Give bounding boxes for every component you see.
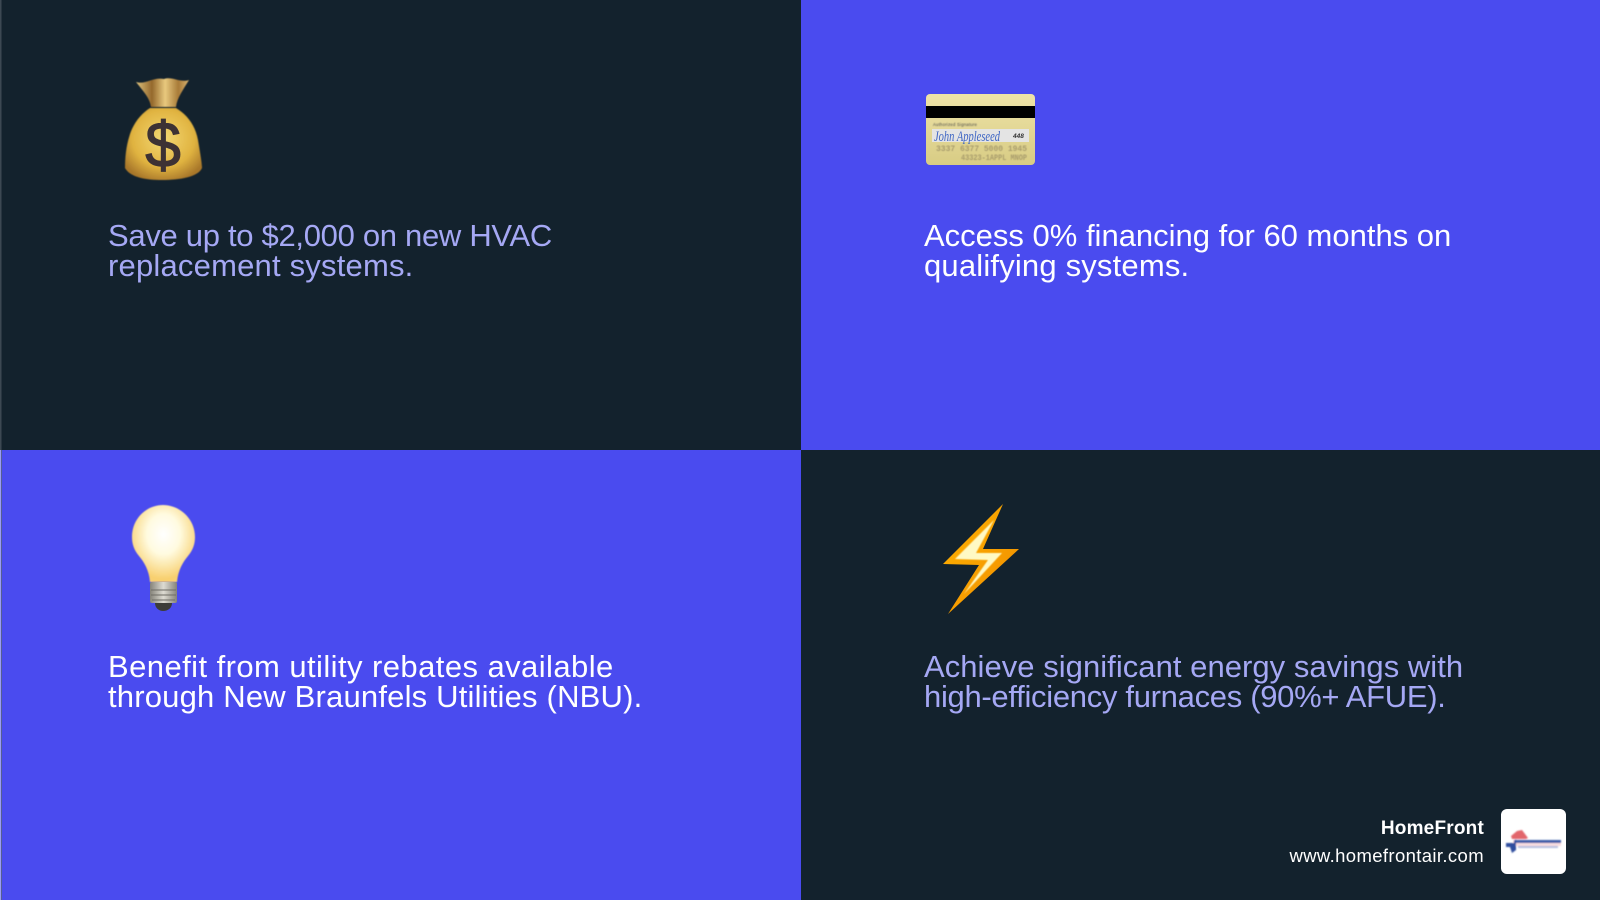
brand name: HomeFront bbox=[1381, 818, 1484, 839]
text: save up to $2,000: replacement systems. bbox=[108, 248, 414, 283]
icon: money bag bbox=[125, 78, 202, 181]
text: save up to $2,000: Save up to $2,000 on new HVAC bbox=[108, 218, 552, 253]
text: financing: Access 0% financing for 60 months on bbox=[924, 218, 1451, 253]
text: energy savings: high-efficiency furnaces (90%+ AFUE). bbox=[924, 679, 1446, 714]
panel: energy savings bbox=[801, 450, 1600, 900]
icon: credit card bbox=[926, 94, 1035, 165]
panel: utility rebates bbox=[2, 450, 801, 900]
icon: lightning bolt bbox=[943, 504, 1019, 614]
website url: www.homefrontair.com bbox=[1289, 845, 1484, 866]
panel: rebates savings bbox=[2, 0, 801, 450]
left edge strip bbox=[0, 0, 2, 900]
icon: credit card: John Appleseed bbox=[934, 129, 1000, 145]
icon: light bulb bbox=[132, 505, 195, 611]
text: utility rebates: through New Braunfels Utilities (NBU). bbox=[108, 679, 642, 714]
text: financing: qualifying systems. bbox=[924, 248, 1189, 283]
logo badge bbox=[1501, 809, 1566, 874]
icon: credit card: 3337 6377 5000 1945 bbox=[936, 145, 1027, 154]
panel: financing bbox=[801, 0, 1600, 450]
text: save up to $2,000 bbox=[108, 218, 552, 283]
icon: credit card: 43323-1APPL MNOP bbox=[961, 154, 1027, 163]
text: utility rebates bbox=[108, 649, 642, 714]
icon: money bag: $ bbox=[145, 109, 181, 181]
text: utility rebates: Benefit from utility rebates available bbox=[108, 649, 614, 684]
text: energy savings bbox=[924, 649, 1463, 714]
icon: credit card: Authorized Signature bbox=[933, 122, 978, 127]
text: financing bbox=[924, 218, 1451, 283]
footer brand text bbox=[1289, 818, 1484, 866]
text: energy savings: Achieve significant energy savings with bbox=[924, 649, 1463, 684]
icon: credit card: 448 bbox=[1012, 133, 1024, 140]
